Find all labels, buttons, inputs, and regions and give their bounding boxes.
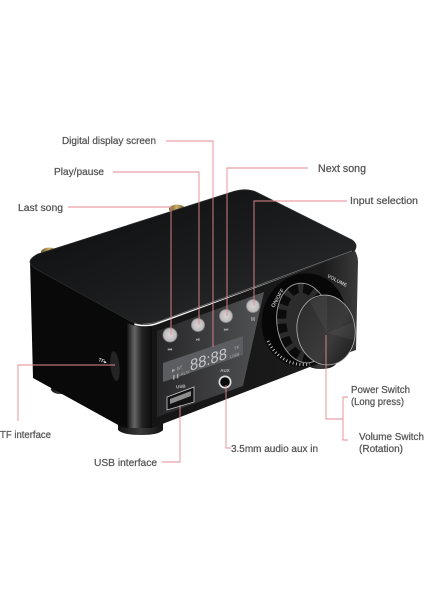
label: power switch: Power Switch: [351, 385, 410, 396]
volume knob: [251, 264, 360, 376]
label: power switch: (Long press): [351, 397, 404, 408]
knob ring: [251, 264, 357, 376]
callout: USB interface: USB interface: [94, 457, 157, 469]
top rim highlight: [143, 251, 352, 324]
callout: 3.5mm audio aux in: [226, 385, 318, 455]
label: volume switch: Volume Switch: [359, 432, 424, 443]
USB label: USB: [176, 383, 187, 389]
USB port: [167, 387, 194, 410]
amplifier device: [30, 190, 360, 435]
button captions: ⏮: [168, 347, 173, 353]
label: volume switch: [359, 432, 424, 455]
callout: TF interface: [0, 365, 115, 441]
button captions: M: [251, 317, 255, 323]
callout: next song: Next song: [318, 163, 366, 175]
callout: digital display screen: Digital display screen: [62, 136, 156, 147]
left side face: [30, 260, 135, 428]
display text: USB: [230, 352, 239, 360]
control panel: [157, 292, 264, 417]
label: volume switch: (Rotation): [359, 444, 403, 455]
knob cap: [292, 291, 360, 369]
callout: input selection: Input selection: [350, 196, 418, 207]
display text: 88:88: [190, 345, 227, 375]
callout: play/pause: Play/pause: [54, 167, 104, 178]
display text: ▶ BT: [172, 365, 183, 373]
TF slot label: TF▸: [97, 357, 108, 366]
cap sheen: [310, 296, 355, 340]
callout: 3.5mm audio aux in: 3.5mm audio aux in: [231, 444, 318, 455]
top face: [30, 190, 356, 324]
ring ticks: [268, 341, 310, 365]
label: power switch: [351, 385, 410, 408]
callout: USB interface: [94, 405, 180, 469]
button captions: [168, 317, 255, 353]
callout: digital display screen: [62, 136, 213, 347]
TF slot: [109, 351, 121, 381]
button captions: ⏭: [224, 327, 229, 333]
ring label volume: VOLUME: [326, 273, 348, 289]
front face: [127, 251, 358, 428]
callout: next song: [227, 163, 366, 316]
callout: power and volume switch: [326, 335, 424, 455]
display text: [172, 341, 240, 381]
callout: input selection: [254, 196, 418, 306]
rear terminals: [41, 204, 185, 256]
buttons: [162, 299, 260, 342]
front corner highlight: [127, 323, 152, 428]
AUX label: AUX: [220, 368, 230, 373]
display text: TF: [234, 344, 240, 351]
grip ribs: [277, 285, 331, 361]
button captions: ⏯: [196, 337, 200, 343]
AUX jack: [218, 376, 232, 388]
ring label on/off: ON/OFF: [271, 287, 286, 309]
callout: last song: Last song: [18, 203, 63, 214]
knob grip: [272, 280, 336, 366]
feet: [51, 358, 336, 435]
callout: TF interface: TF interface: [0, 430, 51, 441]
callout: play/pause: [54, 167, 199, 325]
display panel: [163, 336, 243, 382]
callout: last song: [18, 203, 171, 335]
display text: ❚❚ AUX: [172, 369, 190, 381]
